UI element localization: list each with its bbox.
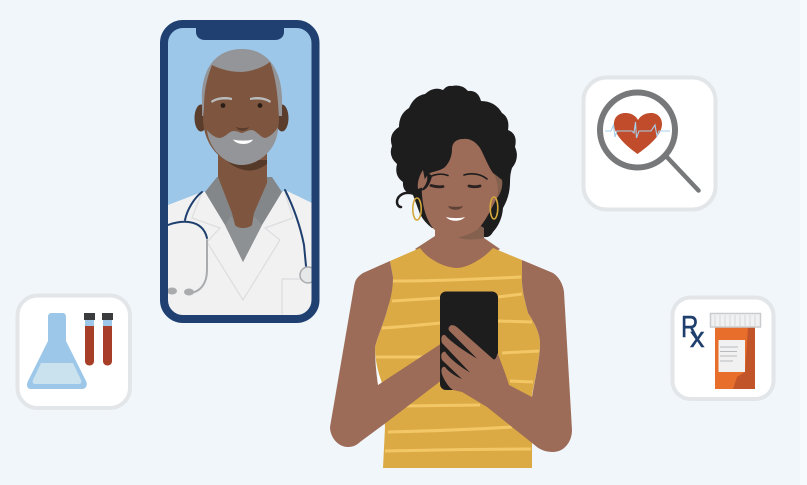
heart (614, 113, 662, 154)
test tube 2 (102, 313, 113, 366)
woman eyebrows (428, 174, 487, 179)
doctor collar and shirt (205, 177, 282, 262)
earrings (413, 197, 498, 220)
woman left arm (330, 261, 442, 447)
card: heart under magnifying glass (584, 78, 716, 210)
woman neck (415, 228, 500, 275)
skin beside curl (418, 170, 426, 189)
doctor beard (207, 127, 278, 165)
phone with doctor on video call (164, 24, 316, 319)
stethoscope (168, 190, 306, 293)
doctor smile (233, 140, 253, 144)
hair strand over face (421, 170, 432, 190)
bottle label (718, 340, 745, 372)
doctor eyebrows (211, 97, 271, 103)
neck shadow (226, 160, 267, 171)
Rx symbol: R (681, 309, 698, 344)
smartphone (440, 292, 498, 390)
shirt stripes (376, 277, 540, 451)
woman nose (448, 206, 463, 210)
hair curl (397, 193, 410, 207)
phone frame (164, 24, 316, 319)
card: prescription bottle (672, 298, 774, 399)
stethoscope tips and chest piece (167, 267, 316, 296)
card background (18, 296, 130, 408)
woman hair (391, 86, 517, 237)
doctor nose (236, 127, 249, 131)
woman holding smartphone (330, 86, 572, 468)
magnifying lens (600, 92, 675, 168)
woman smile (446, 217, 465, 221)
Rx symbol (681, 309, 705, 354)
magnifying handle (665, 155, 698, 190)
test tube 1 (84, 313, 95, 366)
flask liquid (33, 363, 81, 384)
bottle shadow (733, 327, 755, 389)
card background (584, 78, 716, 210)
sleeveless shirt (375, 248, 540, 468)
doctor eyes (221, 103, 262, 108)
heartbeat line (605, 122, 670, 138)
lapels (192, 192, 311, 315)
bottle cap (710, 314, 760, 327)
neck shadow (458, 226, 484, 239)
woman right arm and hand (441, 260, 572, 452)
doctor neck (218, 150, 267, 228)
shirt centre (225, 216, 262, 262)
Rx symbol: x (690, 322, 705, 354)
card: lab flask and test tubes (18, 296, 130, 408)
phone screen background (164, 24, 316, 319)
woman face (422, 139, 502, 240)
temple shadow (493, 173, 502, 198)
doctor hair (202, 49, 282, 116)
flask (27, 313, 87, 389)
bottle body (715, 327, 755, 389)
doctor ears (194, 104, 288, 132)
phone notch (196, 26, 284, 40)
doctor face (203, 62, 279, 165)
card background (672, 298, 774, 399)
woman closed eyes (431, 186, 480, 187)
white gaps under arms (377, 374, 533, 397)
doctor lab coat (168, 190, 312, 315)
